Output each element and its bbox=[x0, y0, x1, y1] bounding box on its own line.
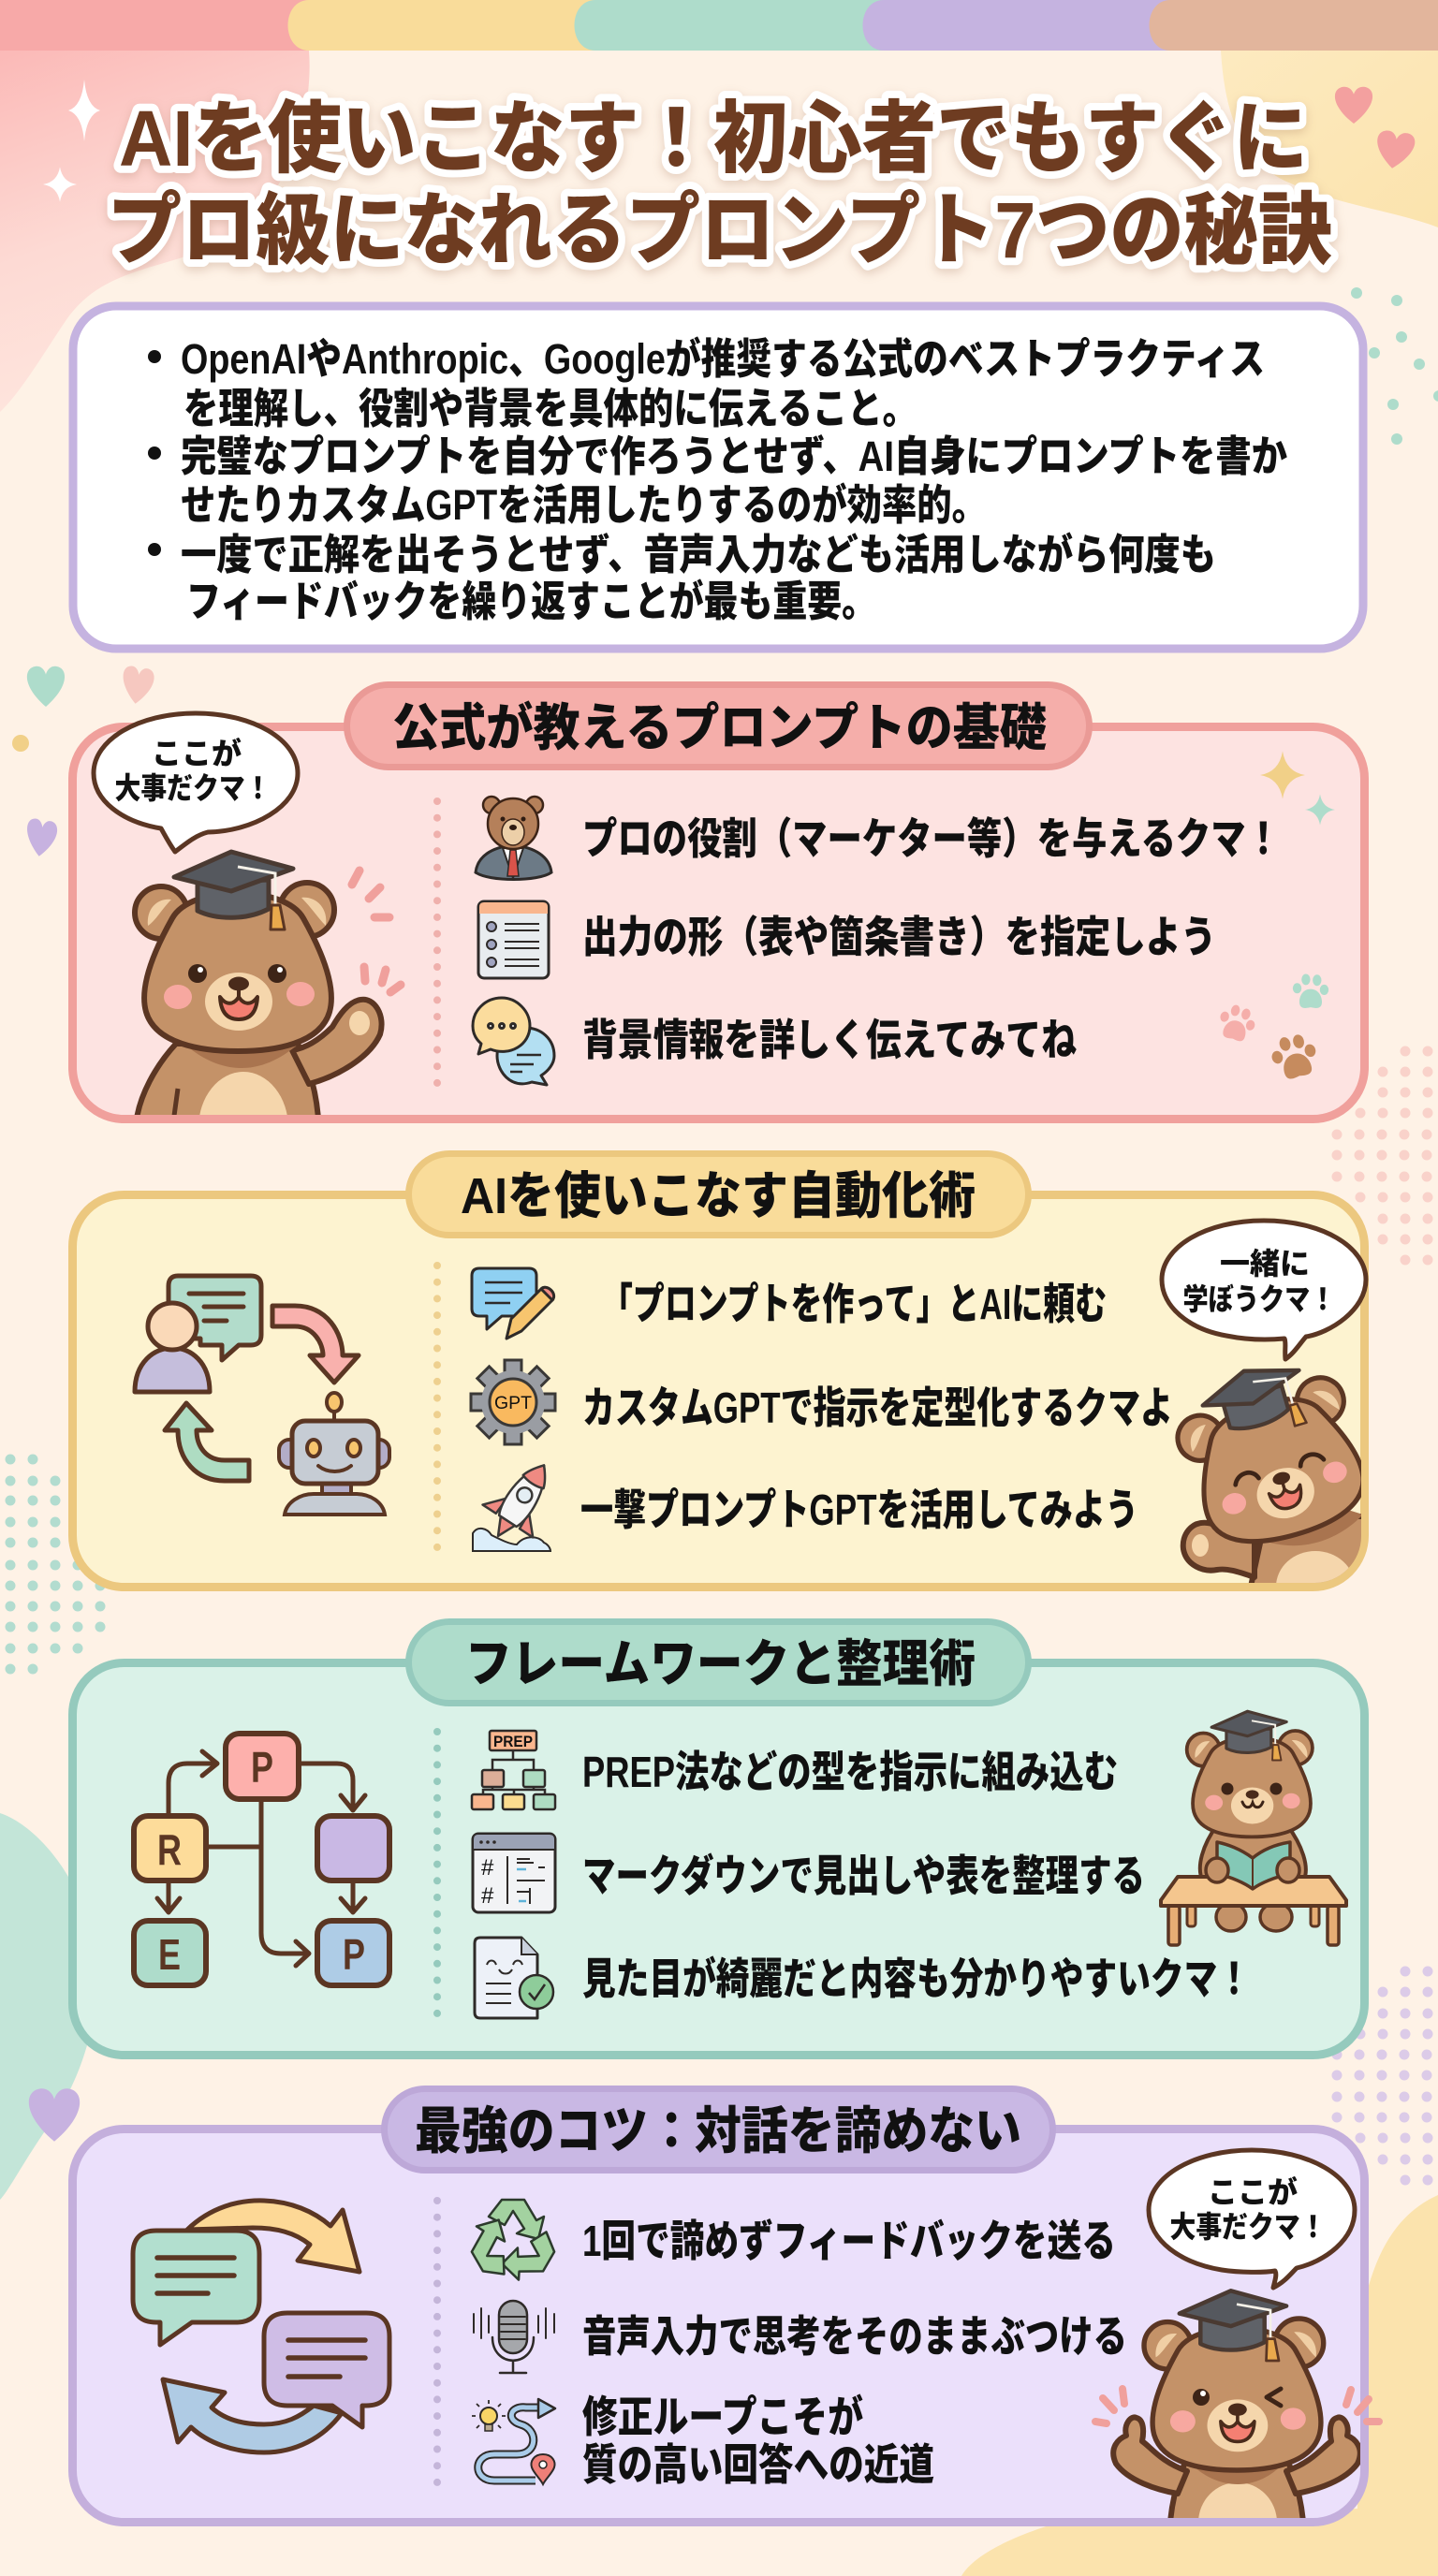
panel: summary: OpenAIやAnthropic、Googleが推奨する公式のベストプラクティス bbox=[181, 335, 1265, 383]
icon: list bbox=[478, 901, 549, 978]
icon: markdown window bbox=[473, 1834, 555, 1912]
row text: 背景情報を詳しく伝えてみてね bbox=[582, 1016, 1077, 1064]
row text: 1回で諦めずフィードバックを送る bbox=[582, 2217, 1116, 2265]
speech bubble bbox=[94, 713, 298, 852]
icon: GPT gear bbox=[471, 1360, 555, 1444]
title: プロ級になれるプロンプト7つの秘訣 bbox=[108, 186, 1332, 274]
row text: 一撃プロンプトGPTを活用してみよう bbox=[580, 1486, 1138, 1534]
icon: rocket bbox=[473, 1449, 569, 1552]
icon: markdown window: # bbox=[481, 1883, 494, 1909]
row text: 出力の形（表や箇条書き）を指定しよう bbox=[582, 913, 1216, 961]
speech bubble: ここが bbox=[152, 737, 242, 770]
illustration: chat loop bbox=[133, 2201, 389, 2452]
row text: マークダウンで見出しや表を整理する bbox=[582, 1852, 1145, 1900]
icon: GPT gear: GPT bbox=[494, 1394, 532, 1413]
panel: automation bbox=[73, 1153, 1376, 1622]
row text: プロの役割（マーケター等）を与えるクマ！ bbox=[582, 814, 1281, 863]
speech bubble: 一緒に bbox=[1220, 1247, 1310, 1281]
speech bubble: 大事だクマ！ bbox=[114, 771, 271, 805]
row text line 2: 質の高い回答への近道 bbox=[582, 2440, 934, 2489]
diagram: PREP flow: E bbox=[158, 1930, 181, 1979]
panel: summary: せたりカスタムGPTを活用したりするのが効率的。 bbox=[181, 481, 987, 529]
diagram: PREP flow: P bbox=[343, 1930, 365, 1979]
bear mascot waving bbox=[132, 850, 385, 1115]
icon: bear in suit bbox=[476, 797, 551, 880]
decorative sparkles and hearts top bbox=[12, 80, 1416, 2142]
title bbox=[108, 95, 1332, 274]
heading pill bbox=[346, 685, 1090, 768]
diagram: PREP flow: P bbox=[251, 1743, 273, 1792]
icon: route with bulb bbox=[472, 2399, 555, 2484]
panel: dialogue bbox=[73, 2089, 1379, 2563]
speech bubble: 大事だクマ！ bbox=[1170, 2210, 1326, 2244]
icon: PREP hierarchy bbox=[472, 1731, 555, 1809]
bear mascot thumbs up bbox=[1110, 2289, 1360, 2518]
sparkles and paw prints bbox=[1215, 751, 1335, 1082]
motion lines bbox=[352, 871, 401, 992]
panel: summary bbox=[73, 306, 1363, 649]
icon: microphone bbox=[474, 2301, 554, 2373]
heading: フレームワークと整理術 bbox=[465, 1636, 976, 1692]
icon: chat bubbles bbox=[473, 998, 554, 1085]
heading: 公式が教えるプロンプトの基礎 bbox=[392, 699, 1047, 756]
row text line 1: 修正ループこそが bbox=[582, 2393, 863, 2441]
heading: 最強のコツ：対話を諦めない bbox=[415, 2103, 1021, 2159]
row text: PREP法などの型を指示に組み込む bbox=[582, 1748, 1118, 1796]
icon: recycle bbox=[462, 2200, 561, 2289]
speech bubble: ここが bbox=[1208, 2175, 1298, 2209]
top color band bbox=[0, 0, 1438, 51]
icon: document with check bbox=[475, 1938, 553, 2018]
icon: PREP hierarchy: PREP bbox=[493, 1733, 533, 1750]
panel: official basics bbox=[68, 681, 1369, 1123]
speech bubble: 学ぼうクマ！ bbox=[1183, 1282, 1335, 1316]
motion lines bbox=[1095, 2389, 1379, 2423]
speech bubble bbox=[1149, 2150, 1355, 2288]
diagram: PREP flow: R bbox=[157, 1825, 182, 1874]
row text: 音声入力で思考をそのままぶつける bbox=[582, 2312, 1127, 2361]
row text: カスタムGPTで指示を定型化するクマよ bbox=[582, 1383, 1173, 1432]
heading pill bbox=[408, 1621, 1028, 1704]
panel: framework bbox=[73, 1621, 1365, 2056]
illustration: person and robot loop bbox=[135, 1276, 389, 1515]
heading pill bbox=[408, 1153, 1028, 1236]
panel: summary: を理解し、役割や背景を具体的に伝えること。 bbox=[183, 385, 917, 432]
icon: markdown window: # bbox=[481, 1855, 494, 1881]
title: AIを使いこなす！初心者でもすぐに bbox=[119, 95, 1308, 183]
panel: summary: 一度で正解を出そうとせず、音声入力なども活用しながら何度も bbox=[181, 531, 1216, 578]
bear mascot reading at desk bbox=[1161, 1711, 1346, 1945]
row text: 見た目が綺麗だと内容も分かりやすいクマ！ bbox=[582, 1954, 1251, 2003]
speech bubble bbox=[1162, 1221, 1366, 1359]
icon: bubble and pencil bbox=[472, 1268, 554, 1339]
bear mascot cheering bbox=[1175, 1368, 1361, 1583]
heading: AIを使いこなす自動化術 bbox=[461, 1168, 976, 1224]
diagram: PREP flow bbox=[134, 1734, 389, 1985]
row text: 「プロンプトを作って」とAIに頼む bbox=[601, 1280, 1107, 1328]
panel: summary: フィードバックを繰り返すことが最も重要。 bbox=[186, 578, 876, 625]
heading pill bbox=[384, 2089, 1052, 2170]
